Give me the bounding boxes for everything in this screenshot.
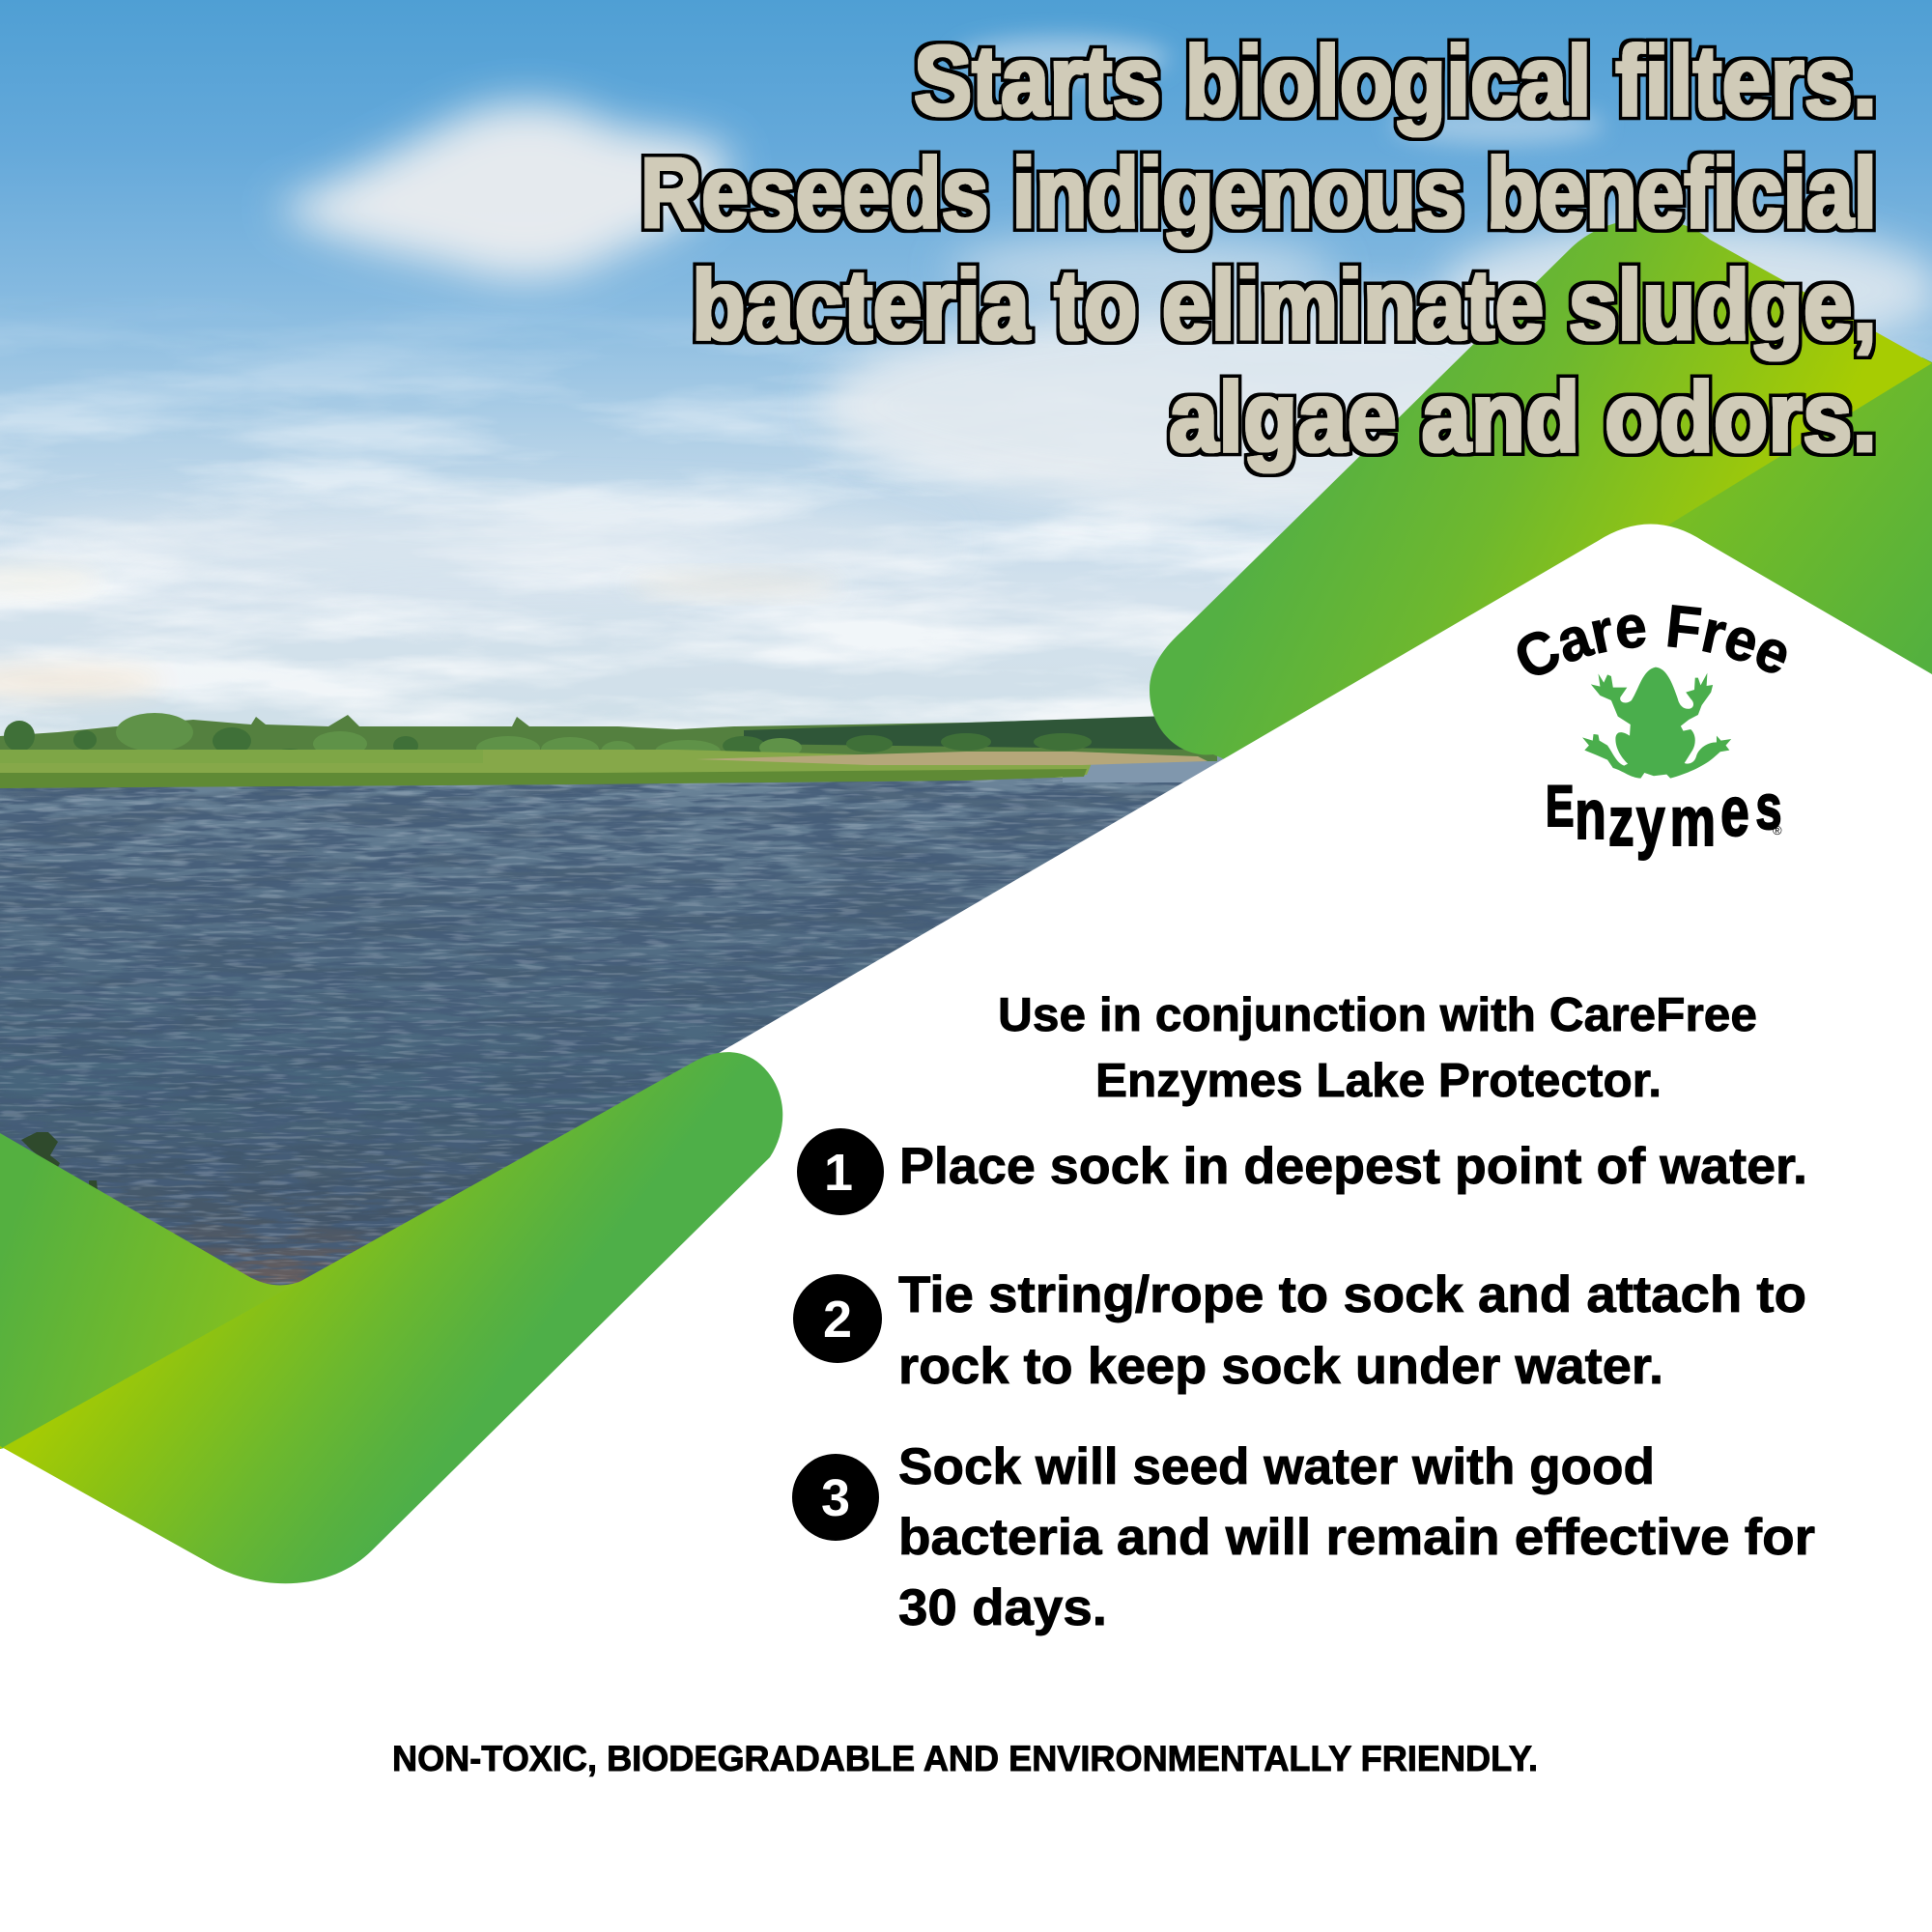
step 3 text: Sock will seed water with good [898,1438,1655,1495]
green chevron main piece [0,1052,782,1583]
step 3 text: 30 days. [898,1579,1107,1636]
photo: lake water [0,778,1256,1319]
step 3 number badge [792,1454,879,1541]
logo: Care Free Enzymes [1517,605,1787,861]
intro text: Enzymes Lake Protector. [1095,1055,1662,1107]
green chevron lower left piece [0,1133,406,1449]
step 2 text: rock to keep sock under water. [898,1338,1663,1395]
photo: sky [0,0,1932,744]
intro text: Use in conjunction with CareFree [998,989,1757,1041]
step 1 number badge: 1 [824,1144,853,1202]
footer statement: NON-TOXIC, BIODEGRADABLE AND ENVIRONMENTALLY FRIENDLY. [392,1739,1538,1778]
step 3 text: bacteria and will remain effective for [898,1509,1815,1566]
step 3 number badge: 3 [821,1469,850,1527]
logo wordmark: Enzymes: E [1546,775,1574,839]
green band right [1642,357,1932,696]
step 2 text: Tie string/rope to sock and attach to [898,1266,1806,1323]
intro text [998,989,1757,1107]
logo wordmark: Enzymes: s [1755,772,1782,843]
step 3 text [898,1438,1815,1636]
step 1 number badge [797,1128,884,1215]
logo wordmark: Enzymes: nzyme [1575,774,1749,861]
step 2 text [898,1266,1806,1395]
logo icon: green frog [1582,668,1731,779]
step 1 text: Place sock in deepest point of water. [899,1138,1807,1195]
step 1 [797,1128,1807,1215]
white content panel [0,524,1932,1932]
step 2 number badge: 2 [823,1291,852,1349]
green band upper with rounded tip [1150,219,1932,773]
step 3 [792,1438,1815,1636]
shrub at lower left of the water [21,1132,99,1200]
photo: far shore with trees and grass [0,713,1256,788]
step 2 [793,1266,1806,1395]
step 2 number badge [793,1274,882,1363]
logo wordmark: Care Free: Care Free [1517,605,1787,675]
logo registered mark: ® [1773,823,1782,838]
headline [640,25,1877,472]
